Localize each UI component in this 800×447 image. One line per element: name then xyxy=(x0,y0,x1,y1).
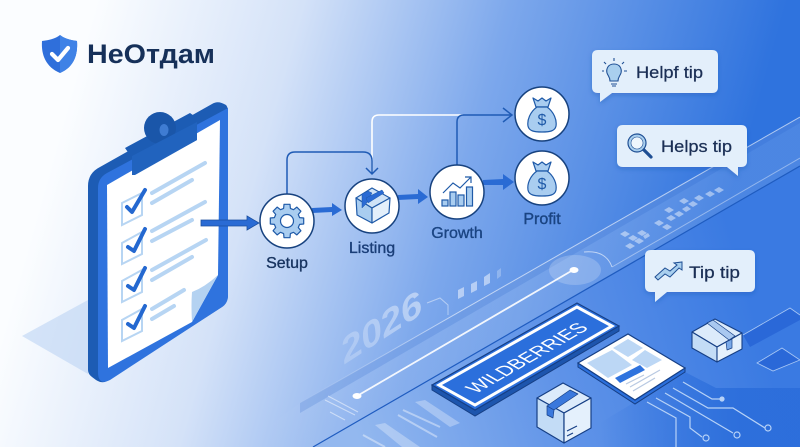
label: growth: Growth xyxy=(431,225,483,242)
arrow: setup to listing xyxy=(312,203,342,216)
year 2026: 2026 xyxy=(335,284,427,372)
node: listing xyxy=(345,179,399,257)
clip xyxy=(125,112,197,175)
label: listing: Listing xyxy=(349,240,395,257)
callout: helpf tip xyxy=(592,50,718,102)
connector: setup to listing xyxy=(287,152,378,194)
callout: tip tip xyxy=(645,250,755,302)
icon: money bag: $ xyxy=(538,176,547,193)
callout: helpf tip: Helpf tip xyxy=(636,63,703,82)
box left xyxy=(537,383,591,443)
logo xyxy=(42,35,215,73)
callout: tip tip: Tip tip xyxy=(689,263,740,282)
icon: growth chart xyxy=(442,177,472,206)
paper xyxy=(107,120,220,368)
connector: growth to profit xyxy=(457,108,512,165)
check marks xyxy=(127,190,145,328)
icon: trend arrow xyxy=(655,262,682,280)
callout: helps tip: Helps tip xyxy=(661,137,732,156)
brand name: НеОтдам xyxy=(87,39,215,69)
node: growth xyxy=(430,165,484,242)
arrow: listing to growth xyxy=(398,189,428,204)
node: setup xyxy=(260,194,314,272)
arrow: clipboard to setup xyxy=(201,216,259,230)
right deck tiles xyxy=(743,308,800,371)
box right xyxy=(692,319,742,362)
product card xyxy=(578,334,685,404)
icon: gear xyxy=(270,204,304,238)
board xyxy=(88,102,228,382)
icon: magnifier xyxy=(628,134,651,157)
isometric platform background xyxy=(240,117,800,447)
data strips xyxy=(325,396,460,447)
arrow: growth to profit xyxy=(483,174,514,190)
small square markers xyxy=(458,268,501,299)
node: profit top xyxy=(515,87,569,141)
Wildberries sign xyxy=(432,303,619,416)
connector: white route xyxy=(372,115,463,172)
clipboard shadow xyxy=(22,300,88,374)
glowing timeline xyxy=(352,267,578,399)
checkboxes xyxy=(122,193,142,341)
icon: light bulb xyxy=(602,58,627,86)
icon: shield xyxy=(42,35,77,73)
label: setup: Setup xyxy=(266,255,308,272)
icon: box xyxy=(356,188,390,223)
clipboard xyxy=(22,102,228,382)
small tile grids xyxy=(620,187,724,249)
checklist lines xyxy=(152,163,206,319)
label: profit: Profit xyxy=(523,211,561,228)
node: profit xyxy=(515,151,569,228)
icon: money bag: $ xyxy=(538,112,547,129)
sign label: WILDBERRIES xyxy=(461,320,594,397)
page fold xyxy=(192,275,218,322)
callout: helps tip xyxy=(617,125,747,176)
circuit traces xyxy=(647,382,771,447)
